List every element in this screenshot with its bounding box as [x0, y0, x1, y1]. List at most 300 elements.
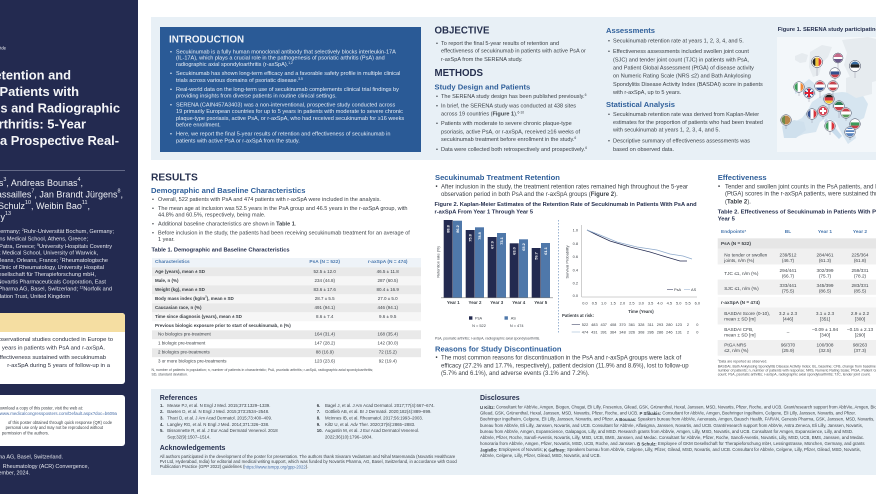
references left column: Sep;32(9):1507–1514.	[167, 434, 211, 440]
discontinuation bullet: •	[436, 355, 438, 361]
figure 1: study participating countries map	[777, 27, 876, 152]
KM y axis ticks: 0.8	[573, 241, 578, 246]
table 1 PsA values	[313, 269, 336, 364]
table 1 PsA values: 8.6 ± 7.4	[316, 314, 334, 319]
references right column: 9.	[317, 422, 320, 427]
table 2 baseline values: (66.7)	[782, 274, 795, 278]
patients at risk table: 0	[696, 330, 699, 334]
bar value labels: 88.8	[446, 224, 451, 233]
patients at risk table: 361	[629, 322, 635, 327]
patients at risk table: 311	[647, 322, 654, 327]
table 1 PsA values: 83.6 ± 17.6	[313, 287, 336, 292]
retention bullet: After inclusion in the study, the treatment retention rates remained high throughout the 5-year	[441, 184, 688, 190]
introduction bullets: SERENA (CAIN457A3403) was a non-interventional, prospective study conducted across	[176, 102, 395, 108]
table 2 row labels: SJC ≤1, n/m (%)	[724, 286, 759, 291]
table 2 year 2 values: (37.3)	[854, 348, 867, 353]
table 1 PsA values: 123 (23.6)	[314, 358, 335, 364]
panel: footer band	[151, 389, 876, 475]
table 1 row labels: Caucasian race, n (%)	[155, 305, 202, 310]
demographic bullets: 1 year.	[158, 237, 175, 243]
introduction bullets: patients with active PsA or r-axSpA from the study.	[176, 138, 300, 144]
assessments bullets: with r-axSpA, up to 5 years.	[612, 90, 682, 96]
conclusion box	[0, 313, 125, 384]
acknowledgements text: All authors participated in the development of the poster for presentation. The authors thank Sivaram Vedantam and Nihal Maremanda (Novartis Healthcare	[160, 454, 456, 459]
pin: Slovakia	[830, 68, 840, 85]
KM x axis ticks: 1.5	[610, 300, 616, 306]
demographic bullets: •	[152, 230, 154, 236]
pin: Greece	[845, 127, 855, 140]
QR code note box: permission of the authors.	[2, 430, 49, 436]
KM x axis ticks: 0.0	[582, 300, 589, 306]
pin: Ireland	[794, 82, 804, 96]
pin: Portugal	[781, 115, 791, 129]
introduction bullets: Here, we report the final 5-year results of retention and effectiveness of secukinumab in	[176, 131, 390, 137]
table 2 year 1 values: (32.5)	[819, 348, 832, 353]
table 1 row labels	[155, 269, 291, 364]
KM x axis ticks: 2.0	[620, 300, 626, 306]
study design bullets: Data were collected both retrospectively and prospectively.6	[441, 146, 587, 153]
table 2 baseline values: 3.2 ± 2.3	[779, 311, 797, 316]
table 1 footnote: N, number of patients in population; n, number of patients in characteristic; PsA, psoriatic arthritis; r-axSpA, radiographic axial spondyloarthritis;	[152, 368, 373, 372]
patients at risk table: 123	[675, 322, 682, 327]
introduction bullets: Real-world data on the long-term use of secukinumab complements clinical trial findings by	[176, 87, 399, 93]
table 1 PsA values: 28.7 ± 5.5	[315, 296, 335, 301]
disclosures heading: Disclosures	[480, 395, 520, 402]
references right column: 10.	[317, 428, 323, 433]
panel: top band background	[151, 17, 876, 160]
table 1 r-axSpA values: 80.4 ± 16.9	[376, 287, 399, 292]
KM x axis ticks: 0.5	[592, 300, 597, 306]
bar value labels: 65.2	[521, 242, 526, 251]
demographic bullets: •	[152, 222, 154, 228]
acknowledgements text	[160, 454, 457, 469]
authors	[0, 177, 123, 222]
objective text: effectiveness of secukinumab in patients with active PsA or	[441, 49, 586, 55]
Kaplan-Meier survival chart: Time (Years)	[628, 309, 654, 314]
effectiveness heading: Effectiveness	[718, 173, 767, 182]
references left column	[160, 403, 278, 440]
references right column	[317, 403, 435, 440]
effectiveness bullet	[718, 184, 876, 205]
references heading: References	[160, 395, 198, 402]
patients at risk table: 0	[696, 322, 699, 327]
study design heading: Study Design and Patients	[434, 82, 530, 92]
KM y axis ticks: 0.6	[573, 254, 578, 259]
table 1 row labels: 1 biologic pre-treatment	[158, 340, 206, 346]
table 1 title: Table 1. Demographic and Baseline Characteristics	[152, 247, 290, 253]
KM legend: AS	[691, 287, 697, 292]
table 2 year 2 values: −0.15 ± 2.13	[847, 327, 873, 332]
pin: United Kingdom	[804, 88, 814, 102]
methods heading: METHODS	[434, 68, 483, 79]
year axis labels: Year 3	[490, 300, 504, 305]
table 1 row labels: Previous biologic exposure prior to start of secukinumab, n (%)	[155, 323, 291, 328]
references right column: Bagel J, et al. J Am Acad Dermatol. 2017;77(4):667–674.	[325, 403, 435, 408]
patients at risk table: 2	[687, 330, 689, 334]
objective heading: OBJECTIVE	[434, 26, 490, 36]
Kaplan-Meier survival chart	[562, 225, 701, 334]
disclosures text: honoraria from AbbVie, Amgen, Pfizer, Novartis, MSD, UCB, Roche, and Janssen. B Schulz: Employee of GKM Gesellschaft für Therapieforschung mbH, Lessingstrasse, München, Germany, and grants	[480, 441, 865, 446]
study design bullets	[436, 93, 587, 153]
demographic bullets: The mean age at inclusion was 52.5 years in the PsA group and 46.5 years in the r-axSpA group, with	[158, 206, 407, 212]
panel: assessments and statistical analysis	[606, 26, 763, 153]
bar value labels	[446, 224, 548, 260]
bar chart legend: AS	[511, 316, 516, 320]
affiliations: Pharma AG, Basel, Switzerland; 12Norfolk and	[0, 286, 112, 293]
table 1 PsA values: 52.5 ± 12.0	[313, 269, 336, 274]
KM x axis ticks: 3.0	[638, 300, 645, 306]
references left column: Mease PJ, et al. N Engl J Med. 2015;373:1329–1339.	[167, 403, 270, 408]
statistical analysis bullets: Secukinumab retention rate was derived from Kaplan-Meier	[613, 112, 759, 118]
table 2 baseline values	[779, 252, 797, 353]
table 1 PsA values: 88 (16.9)	[316, 350, 334, 354]
table 2 baseline values: (46.7)	[782, 258, 795, 263]
disclosures text: Jagiello: Employees of Novartis; K Gaffney: Speakers bureau from AbbVie, Celgene, Lilly, Pfizer, Gilead, MSD, Novartis, and UCB. Consultant for AbbVie, Celgene, Lilly, Pfizer, Gilead, MSD, Novartis,	[480, 447, 861, 452]
table 1 header: Characteristics	[155, 259, 190, 265]
discontinuation heading: Reasons for Study Discontinuation	[435, 344, 562, 354]
references left column: Bissonnette R, et al. J Eur Acad Dermatol Venereol. 2018	[167, 428, 278, 433]
statistical analysis bullets: Descriptive summary of effectiveness assessments was	[613, 138, 750, 144]
introduction bullets	[170, 49, 404, 144]
table 1 row labels: 3 or more biologics pre-treatments	[158, 358, 227, 364]
KM x axis ticks: 4.5	[667, 300, 672, 306]
references left column: 4.	[160, 422, 164, 427]
introduction bullets: radiographic axial spondyloarthritis (r-axSpA).1,2	[176, 61, 293, 68]
table 2 year 2 values: 98/263	[853, 342, 868, 348]
Kaplan-Meier survival chart: Patients at risk:	[562, 313, 595, 318]
demographic heading: Demographic and Baseline Characteristics	[151, 186, 305, 195]
pin: Bulgaria	[850, 119, 860, 132]
table 2 header: BL	[785, 229, 791, 235]
acknowledgements heading: Acknowledgements	[160, 445, 226, 452]
table 2 year 1 values: [340]	[820, 332, 830, 338]
patients at risk table: 2	[687, 322, 689, 327]
table 2 row labels: mean ± SD [m]	[724, 332, 756, 338]
patients at risk table: 328	[638, 322, 644, 327]
table 1 header	[155, 259, 408, 265]
references right column: McInnes IB, et al. Rheumatol. 2017;56:1993–2003.	[325, 416, 423, 420]
pin: Hungary	[841, 108, 851, 121]
table 2 year 2 values: (78.2)	[854, 274, 867, 278]
study design bullets: •	[436, 121, 438, 127]
table 1 r-axSpA values: 446 (94.1)	[377, 305, 398, 310]
table 2 year 2 values: 283/331	[852, 283, 869, 288]
table 2 baseline values: 294/441	[780, 268, 797, 273]
table 2 year 1 values: [351]	[820, 316, 830, 322]
table 2 baseline values: 239/512	[780, 252, 797, 258]
table 1 PsA values: 234 (44.8)	[314, 278, 335, 283]
discontinuation bullet	[436, 355, 689, 377]
references right column: Augustin M, et al. J Eur Acad Dermatol Venereol.	[325, 428, 419, 433]
acknowledgements text: Pvt Ltd, Hyderabad, India) for editorial and medical writing support, which was funded by Novartis Pharma, AG, Basel, Switzerland, in accordance with Good	[160, 459, 457, 464]
disclosures text: Gilead, GSK, Grünenthal, Hexal, Janssen, MSD, Novartis, Pfizer, Roche, and UCB. P Sfikakis: Consultant for AbbVie, Amgen, Boehringer Ingelheim, Celgene, Eli Lilly, Janssen, Novartis, and Pfizer.	[480, 410, 856, 416]
table 2 header: Year 2	[853, 229, 867, 235]
assessments bullets: Spondylitis Disease Activity Index (BASDAI) score in patients	[613, 82, 763, 88]
bar value labels: 67.9	[490, 240, 495, 249]
disclosures text: Boehringer Ingelheim, Celgene, Eli Lilly, Janssen, Novartis, and Pfizer. A Bounas: Speakers bureau from AbbVie, Aenorasis, Amgen, Bausch Health, FARAN, Genesis Pharma, GSK, Janssen, MSD, Novartis,	[480, 416, 874, 422]
KM y axis ticks: 0.4	[573, 268, 579, 272]
table 2 row labels: PtGA NRS	[724, 342, 746, 348]
Kaplan-Meier survival chart: Survival Probability	[564, 245, 570, 279]
figure 2 title: r-axSpA From Year 1 Through Year 5	[434, 209, 533, 215]
patients at risk table: 391	[600, 330, 607, 334]
KM x axis ticks: 4.0	[657, 300, 664, 306]
year axis labels: Year 5	[534, 300, 548, 305]
introduction bullets: •	[170, 71, 172, 77]
year axis labels: Year 1	[447, 300, 460, 305]
KM x axis ticks	[582, 300, 701, 306]
disclosures text	[480, 404, 876, 458]
table 1 row labels: Body mass index (kg/m2), mean ± SD	[155, 294, 234, 301]
bar chart legend: PsA	[475, 316, 483, 320]
table 2 footnote: count; PsA, psoriatic arthritis; r-axSpA, radiographic axial spondyloarthritis; TJC, tender joint count.	[718, 373, 871, 377]
table 2 baseline values: 96/370	[781, 342, 796, 348]
bar value labels: 86.2	[455, 224, 460, 233]
table 2 year 2 values: [290]	[855, 332, 865, 338]
objective text: •	[436, 41, 438, 47]
year axis labels: Year 2	[469, 300, 482, 305]
pin: Germany	[824, 94, 834, 109]
table 1 header: r-axSpA (N = 474)	[368, 259, 408, 265]
study design bullets: •	[436, 94, 438, 100]
references right column: Gottlieb AB, et al. Br J Dermatol. 2020;182(4):889–899.	[325, 409, 431, 414]
patients at risk table: 431	[591, 330, 598, 334]
bar value labels: 73.1	[499, 236, 504, 245]
references left column: Baeten D, et al. N Engl J Med. 2015;373:2534–2548.	[167, 409, 269, 414]
disclosures text: AbbVie, Pfizer, Roche, Sanofi-Aventis, Novartis, Lilly, MSD, UCB, BMS, Janssen, and Medac. Consultant for AbbVie, Pfizer, Roche, Sanofi-Aventis, Novartis, Lilly, MSD, UCB, BMS, Janssen, and Medac.	[480, 435, 864, 440]
statistical analysis bullets	[608, 112, 763, 153]
KM x axis ticks: 2.5	[629, 300, 635, 306]
introduction bullets: •	[170, 102, 172, 108]
country pins	[781, 53, 861, 140]
introduction bullets: providing insights from diverse patients in routine clinical settings.	[176, 94, 337, 100]
assessments heading: Assessments	[606, 26, 655, 35]
study design bullets: psoriasis, active PsA, or r-axSpA, received ≥16 weeks of	[441, 129, 580, 135]
table 1	[152, 258, 421, 365]
patients at risk table: 293	[657, 322, 663, 327]
pin: France	[807, 109, 817, 123]
panel: secukinumab treatment retention	[434, 173, 701, 377]
patients at risk table: 483	[591, 322, 598, 327]
table 2 baseline values: 333/441	[780, 283, 797, 288]
conclusion box: years in patients with PsA and r-axSpA.	[2, 346, 105, 352]
table 1 r-axSpA values: 27.0 ± 5.0	[378, 296, 398, 301]
demographic bullets: Additional baseline characteristics are shown in Table 1.	[158, 222, 297, 228]
table 2 header: Year 1	[818, 229, 832, 235]
objective text: r-axSpA from the SERENA study.	[441, 57, 523, 63]
study design bullets: •	[436, 147, 438, 153]
patients at risk table	[572, 322, 699, 334]
study design bullets: •	[436, 104, 438, 110]
table 2 baseline values: (25.9)	[782, 348, 795, 353]
KM y axis ticks	[573, 228, 579, 298]
table 1 row labels: 2 biologics pre-treatments	[158, 350, 211, 354]
references right column: 6.	[317, 403, 320, 408]
patients at risk table: 437	[600, 322, 607, 327]
bar value labels: 59.7	[534, 252, 539, 260]
demographic bullets: Before inclusion in the study, the patients had been receiving secukinumab treatment for an average of	[158, 230, 410, 236]
statistical analysis bullets: with secukinumab at years 1, 2, 3, 4, and 5.	[612, 128, 720, 134]
bar value labels: 78.8	[477, 231, 482, 240]
table 1 row labels: Time since diagnosis (years), mean ± SD	[155, 314, 243, 319]
table 1 row labels: Male, n (%)	[155, 278, 179, 283]
patients at risk table: 280	[666, 322, 673, 327]
KM x axis ticks: 5.0	[676, 300, 682, 306]
affiliations: Clinic of Rheumatology, University Hospital	[0, 265, 104, 271]
table 1 PsA values: 147 (28.2)	[314, 340, 335, 346]
table 1 r-axSpA values: 168 (35.4)	[377, 332, 398, 336]
year axis labels	[447, 300, 548, 305]
table 2 row labels: No tender or swollen	[724, 252, 768, 258]
patients at risk table: 308	[638, 330, 644, 334]
table 2 year 1 values: 302/399	[817, 268, 834, 273]
objective text	[436, 41, 586, 63]
table 2 baseline values: [446]	[783, 316, 793, 322]
references right column: 7.	[317, 409, 320, 414]
KM curves	[587, 230, 692, 261]
pin: Czechia	[833, 53, 843, 72]
KM y axis ticks: 0.2	[573, 280, 578, 286]
table 2 row labels: BASDAI CFB,	[724, 327, 753, 332]
statistical analysis heading: Statistical Analysis	[606, 100, 675, 109]
pin: Poland	[834, 101, 844, 118]
objective text: To report the final 5-year results of retention and	[441, 41, 559, 47]
bar value labels: 63.0	[512, 247, 517, 255]
panel: results left column	[151, 172, 421, 376]
table 2 row labels: ≤2, n/m (%)	[724, 348, 749, 353]
conclusion box: r-axSpA during 5 years of follow-up in a	[7, 363, 111, 369]
figure 2 footnote: PsA, psoriatic arthritis; r-axSpA, radiographic axial spondyloarthritis.	[435, 336, 540, 340]
disclosures text: AbbVie, Celgene, Lilly, Pfizer, Gilead, MSD, Novartis, and UCB.	[480, 453, 601, 458]
patients at risk table: 286	[657, 330, 663, 334]
table 2 title: Year 5	[718, 216, 736, 222]
retention heading: Secukinumab Treatment Retention	[435, 173, 560, 182]
table 2 year 1 values: 345/399	[817, 283, 834, 288]
introduction bullets: plaque-type psoriasis, active PsA, or r-axSpA, who had received secukinumab for ≥16 weeks	[176, 116, 404, 122]
table 2 row labels: TJC ≤1, n/m (%)	[724, 271, 759, 276]
funding and congress note: Rheumatology (ACR) Convergence,	[3, 464, 89, 470]
table 2 year 1 values: 3.1 ± 2.3	[816, 311, 834, 316]
map landmass	[782, 37, 876, 144]
table 1 row labels: No biologics pre-treatment	[158, 332, 212, 336]
disclosures text: U Kiltz: Consultant for AbbVie, Amgen, Biogen, Chugai, Eli Lilly, Fresenius, Gilead, GSK, Grünenthal, Hexal, Janssen, MSD, Novartis, Pfizer, Roche, and UCB. Grant/research support from AbbVie, Amgen, Biogen,	[480, 404, 876, 410]
QR code note box: personal use only and may not be reproduced without	[6, 425, 104, 430]
patients at risk table: 364	[610, 330, 617, 334]
introduction bullets: •	[170, 87, 172, 93]
bar chart legend: N = 522	[472, 323, 486, 328]
introduction bullets: •	[170, 131, 172, 137]
retention bullet: •	[436, 184, 438, 190]
funding and congress note	[0, 455, 89, 476]
table 2 baseline values: (75.5)	[782, 288, 795, 294]
table 1 header: PsA (N = 522)	[309, 259, 340, 265]
patients at risk table: 246	[666, 330, 673, 334]
table 2 year 1 values: (75.7)	[819, 274, 832, 278]
references right column: 2022;36(10):1796–1804.	[325, 434, 373, 440]
affiliations	[0, 228, 114, 300]
introduction bullets: before enrollment.	[176, 122, 221, 128]
demographic bullets: Overall, 522 patients with PsA and 474 patients with r-axSpA were included in the analysis.	[158, 197, 381, 203]
table 2 row labels: joints, n/m (%)	[723, 258, 755, 263]
table 1 footnote: SD, standard deviation.	[152, 372, 188, 376]
figure 2 title: Figure 2. Kaplan-Meier Estimates of the Retention Rate of Secukinumab in Patients With PsA and	[434, 202, 697, 208]
assessments bullets: •	[608, 49, 610, 55]
retention bullet	[436, 184, 688, 198]
assessments bullets: and Patient Global Assessment (PtGA) of disease activity	[613, 65, 754, 71]
table 2 row labels: r-axSpA (N = 474)	[721, 300, 760, 305]
table 2 year 1 values	[812, 252, 838, 353]
table 2 footnote: a Data are reported as observed.	[718, 359, 767, 363]
table 2 header: Endpointsa	[721, 228, 746, 235]
bar chart: retention rate by year	[436, 220, 553, 328]
table 1 row labels: Age (years), mean ± SD	[155, 269, 206, 274]
table 2	[718, 228, 876, 356]
references left column: 1.	[160, 403, 164, 408]
affiliations: Patra, Greece; 5University Hospitals Coventry	[0, 243, 112, 250]
statistical analysis bullets: •	[608, 112, 610, 118]
references right column: 8.	[317, 416, 320, 420]
table 2 row labels: PsA (N = 522)	[721, 241, 751, 246]
patients at risk table: 408	[610, 322, 616, 327]
table 2 year 2 values: 259/331	[852, 268, 869, 273]
table 2 title	[718, 209, 876, 222]
table 2 year 1 values: (86.5)	[819, 288, 832, 294]
discontinuation bullet: The most common reasons for discontinuation in the PsA and r-axSpA groups were lack of	[441, 355, 681, 361]
patients at risk table: 326	[629, 330, 635, 334]
table 2 year 1 values: 284/461	[817, 252, 834, 258]
figure 2 title	[434, 202, 697, 215]
KM x axis ticks: 3.5	[648, 300, 653, 306]
introduction bullets: 19 primarily European countries for up to 5 years in patients with moderate to severe chronic	[176, 109, 403, 115]
table 1 PsA values: 491 (94.1)	[314, 305, 335, 310]
KM x axis ticks: 5.5	[685, 300, 691, 306]
references left column: 3.	[160, 416, 164, 420]
patients at risk table: 522	[582, 322, 588, 327]
year axis labels: Year 4	[512, 300, 526, 305]
table 2 year 1 values: −0.09 ± 1.94	[812, 327, 838, 332]
pin: Austria	[828, 81, 838, 108]
patients at risk table: 370	[619, 322, 627, 327]
references left column: 2.	[160, 409, 164, 414]
pin: Netherlands	[815, 81, 825, 98]
references left column: Thaci D, et al. J Am Acad Dermatol. 2015;73:400–409.	[167, 416, 272, 420]
table 2 year 2 values: (85.5)	[854, 288, 867, 294]
table 2 year 1 values: (61.3)	[819, 258, 832, 263]
bar chart: retention rate by year: Retention rate (%)	[436, 246, 440, 278]
acknowledgements text: Publication Practice (GPP 2022) guidelines (https://www.ismpp.org/gpp-2022).	[160, 464, 308, 469]
table 2 baseline values: –	[787, 330, 790, 334]
disclosures text: bureau from AbbVie, Eli Lilly, Janssen, Novartis, and UCB. Consultant for AbbVie, Alfasigma, Janssen, Novartis, and UCB. Grant/research support from AbbVie, Astra Zeneca, Eli Lilly, Janssen, Novartis,	[480, 423, 863, 428]
poster title	[0, 68, 120, 148]
study design bullets: Patients with moderate to severe chronic plaque-type	[441, 121, 572, 127]
assessments bullets: •	[608, 39, 610, 45]
KM legend	[667, 287, 697, 292]
demographic bullets	[152, 197, 410, 243]
references left column: 5.	[160, 428, 164, 433]
effectiveness bullet: •	[718, 184, 720, 190]
discontinuation bullet: efficacy (27.2% and 17.7%, respectively), patient decision (11.9% and 8.6%), lost to follow-up	[441, 364, 689, 370]
introduction bullets: trials across various domains of psoriatic disease.3-5	[176, 77, 303, 84]
introduction bullets: •	[170, 49, 172, 55]
bar chart legend	[469, 316, 524, 328]
bar value labels: 61.1	[543, 246, 548, 255]
table 1 r-axSpA values	[376, 269, 399, 364]
table 2 year 1 values: 100/308	[817, 342, 834, 348]
KM legend: PsA	[674, 287, 682, 292]
patients at risk table: 348	[619, 330, 626, 334]
table 2 year 2 values: [300]	[855, 316, 865, 322]
demographic bullets: •	[152, 197, 154, 203]
